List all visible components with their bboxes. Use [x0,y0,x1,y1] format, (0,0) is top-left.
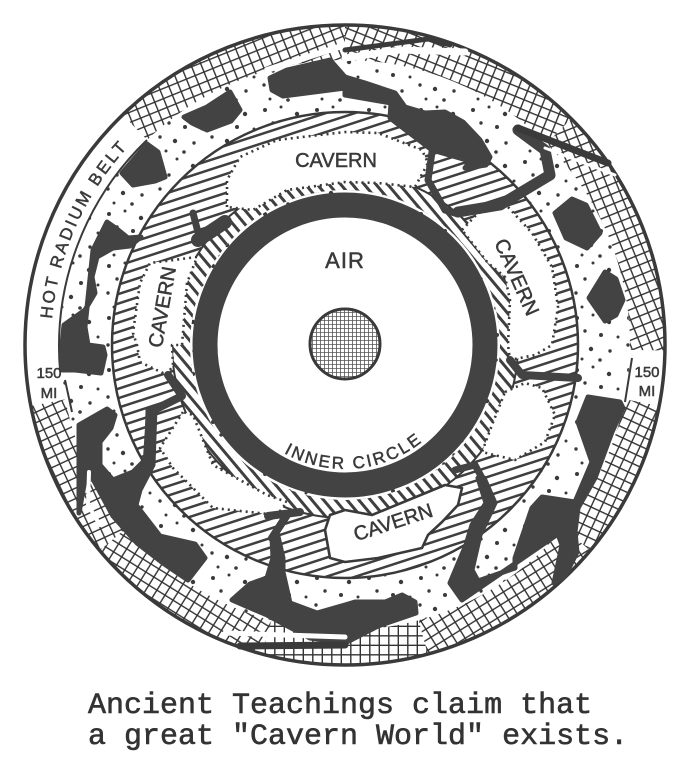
blob: upper left [184,92,240,130]
label: cavern right: CAVERN [489,236,543,319]
ring lines [112,112,578,578]
label: left 150 mi: MI [41,385,57,402]
label: right 150 mi: 150 [634,364,660,381]
blob: left of hot belt end [122,144,165,185]
label: cavern bottom: CAVERN [351,500,436,546]
label: cavern left: CAVERN [145,265,181,349]
blob: right lower hexagon [589,272,623,321]
cavern: right [462,207,558,360]
top dark streak and white gap [88,39,615,646]
divider: right gauge [625,358,632,402]
inner hatched ring [172,172,518,518]
stippled rock layer [25,25,665,665]
cavern: lower left [160,412,287,515]
caption [88,689,628,754]
caption: Ancient Teachings claim that [88,689,592,723]
blob: top band [270,60,490,168]
outer boundary [25,25,665,665]
cavern: top [227,132,428,210]
caverns [133,132,558,562]
divider: left gauge [65,380,72,412]
label: inner circle: INNER CIRCLE [285,433,422,470]
blob: lower right [450,397,623,600]
cavern: left [133,257,197,375]
hot radium belt inner line [59,140,147,370]
crosshatched outer belt [27,26,664,664]
blob: right upper hexagon [555,199,600,248]
label: right 150 mi: MI [639,383,655,400]
blob: bottom [232,532,416,643]
blob: lower left [79,408,205,580]
fissures [147,130,578,538]
cavern: lower right [482,383,555,460]
black air ring [205,205,485,485]
panel: globe cross-section [23,23,667,667]
central core [310,309,380,379]
caption: a great "Cavern World" exists. [88,720,628,754]
cavern: bottom [325,485,462,562]
label: air: AIR [325,248,365,273]
label: cavern top: CAVERN [295,150,377,172]
black magma blobs [62,60,623,643]
blob: left side [62,222,141,373]
label: left 150 mi: 150 [36,365,62,382]
label: hot radium belt: HOT RADIUM BELT [40,140,124,318]
hatched shell between rings [112,112,578,578]
